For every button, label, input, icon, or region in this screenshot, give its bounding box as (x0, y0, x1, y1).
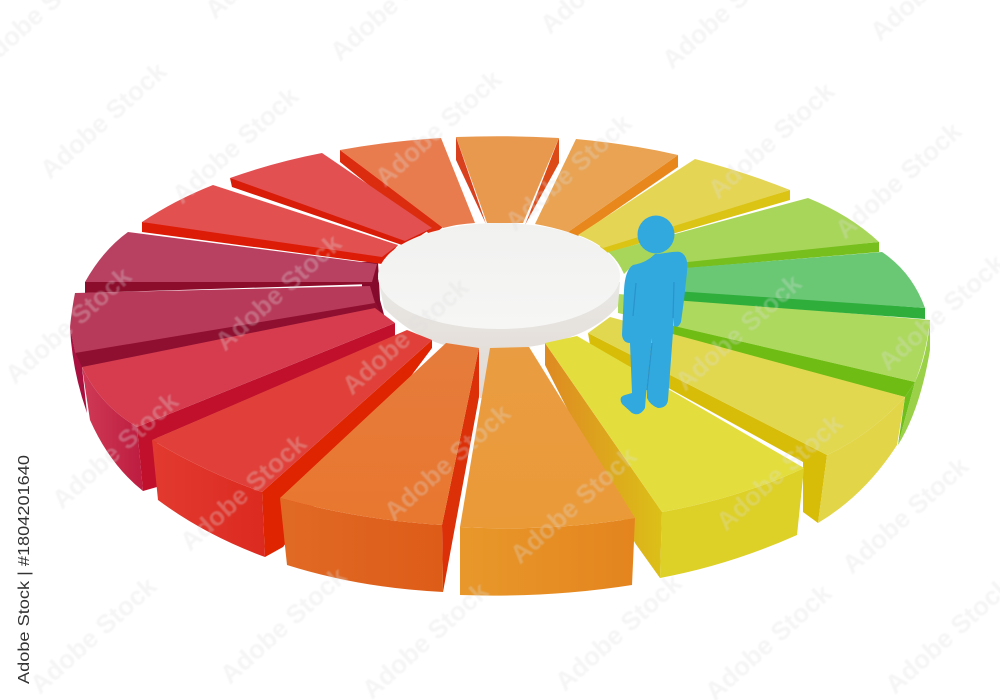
segment: back orange (340, 138, 475, 236)
segment: crimson red front left (82, 308, 395, 491)
watermarks: Adobe Stock repeated: Adobe Stock (336, 271, 475, 400)
segment: back yellow (578, 159, 790, 254)
segment: crimson upper (85, 232, 378, 293)
centre disk (378, 223, 620, 398)
watermarks: Adobe Stock repeated: Adobe Stock (702, 75, 841, 204)
watermarks: Adobe Stock repeated: Adobe Stock (499, 107, 638, 236)
watermarks: Adobe Stock repeated: Adobe Stock (504, 440, 643, 569)
figure: blue standing person (621, 216, 687, 414)
watermarks: Adobe Stock repeated: Adobe Stock (710, 407, 849, 536)
segment: yellow right (588, 317, 905, 523)
segment: light green lower (618, 294, 930, 445)
segment: red left back (142, 185, 398, 264)
segment: back centre amber (456, 136, 559, 225)
watermarks: Adobe Stock repeated: Adobe Stock (166, 80, 305, 209)
watermarks: Adobe Stock repeated: Adobe Stock (369, 63, 508, 192)
figure head (638, 216, 674, 254)
watermarks: Adobe Stock repeated: Adobe Stock (174, 427, 313, 556)
figure body and legs (621, 252, 687, 414)
watermarks: Adobe Stock repeated: Adobe Stock (549, 567, 688, 696)
segment: amber front (460, 347, 635, 596)
watermarks: Adobe Stock repeated: Adobe Stock (34, 55, 173, 184)
segment: dark inner gap on left (362, 262, 386, 322)
segment: back light amber (535, 139, 678, 236)
segment: dark green (660, 252, 925, 319)
watermarks: Adobe Stock repeated: Adobe Stock (669, 267, 808, 396)
watermarks: Adobe Stock repeated: Adobe Stock (46, 385, 185, 514)
segment: light green upper (608, 198, 879, 274)
segment: orange front (280, 343, 479, 592)
watermarks: Adobe Stock repeated: Adobe Stock (0, 260, 138, 389)
watermarks: Adobe Stock repeated: Adobe Stock (24, 570, 163, 699)
stock id label: Adobe Stock | #1804201640 (16, 455, 33, 684)
watermarks: Adobe Stock repeated: Adobe Stock (214, 560, 353, 689)
watermarks: Adobe Stock repeated: Adobe Stock (829, 115, 968, 244)
segment: crimson lower (70, 286, 380, 413)
segment: red front (152, 330, 432, 557)
segment: yellow front (545, 336, 804, 578)
watermarks: Adobe Stock repeated: Adobe Stock (378, 397, 517, 526)
figure limb shading (633, 282, 674, 390)
segment: red upper back (230, 153, 432, 246)
watermarks: Adobe Stock repeated: Adobe Stock (209, 227, 348, 356)
watermarks: Adobe Stock repeated: Adobe Stock (836, 450, 975, 579)
